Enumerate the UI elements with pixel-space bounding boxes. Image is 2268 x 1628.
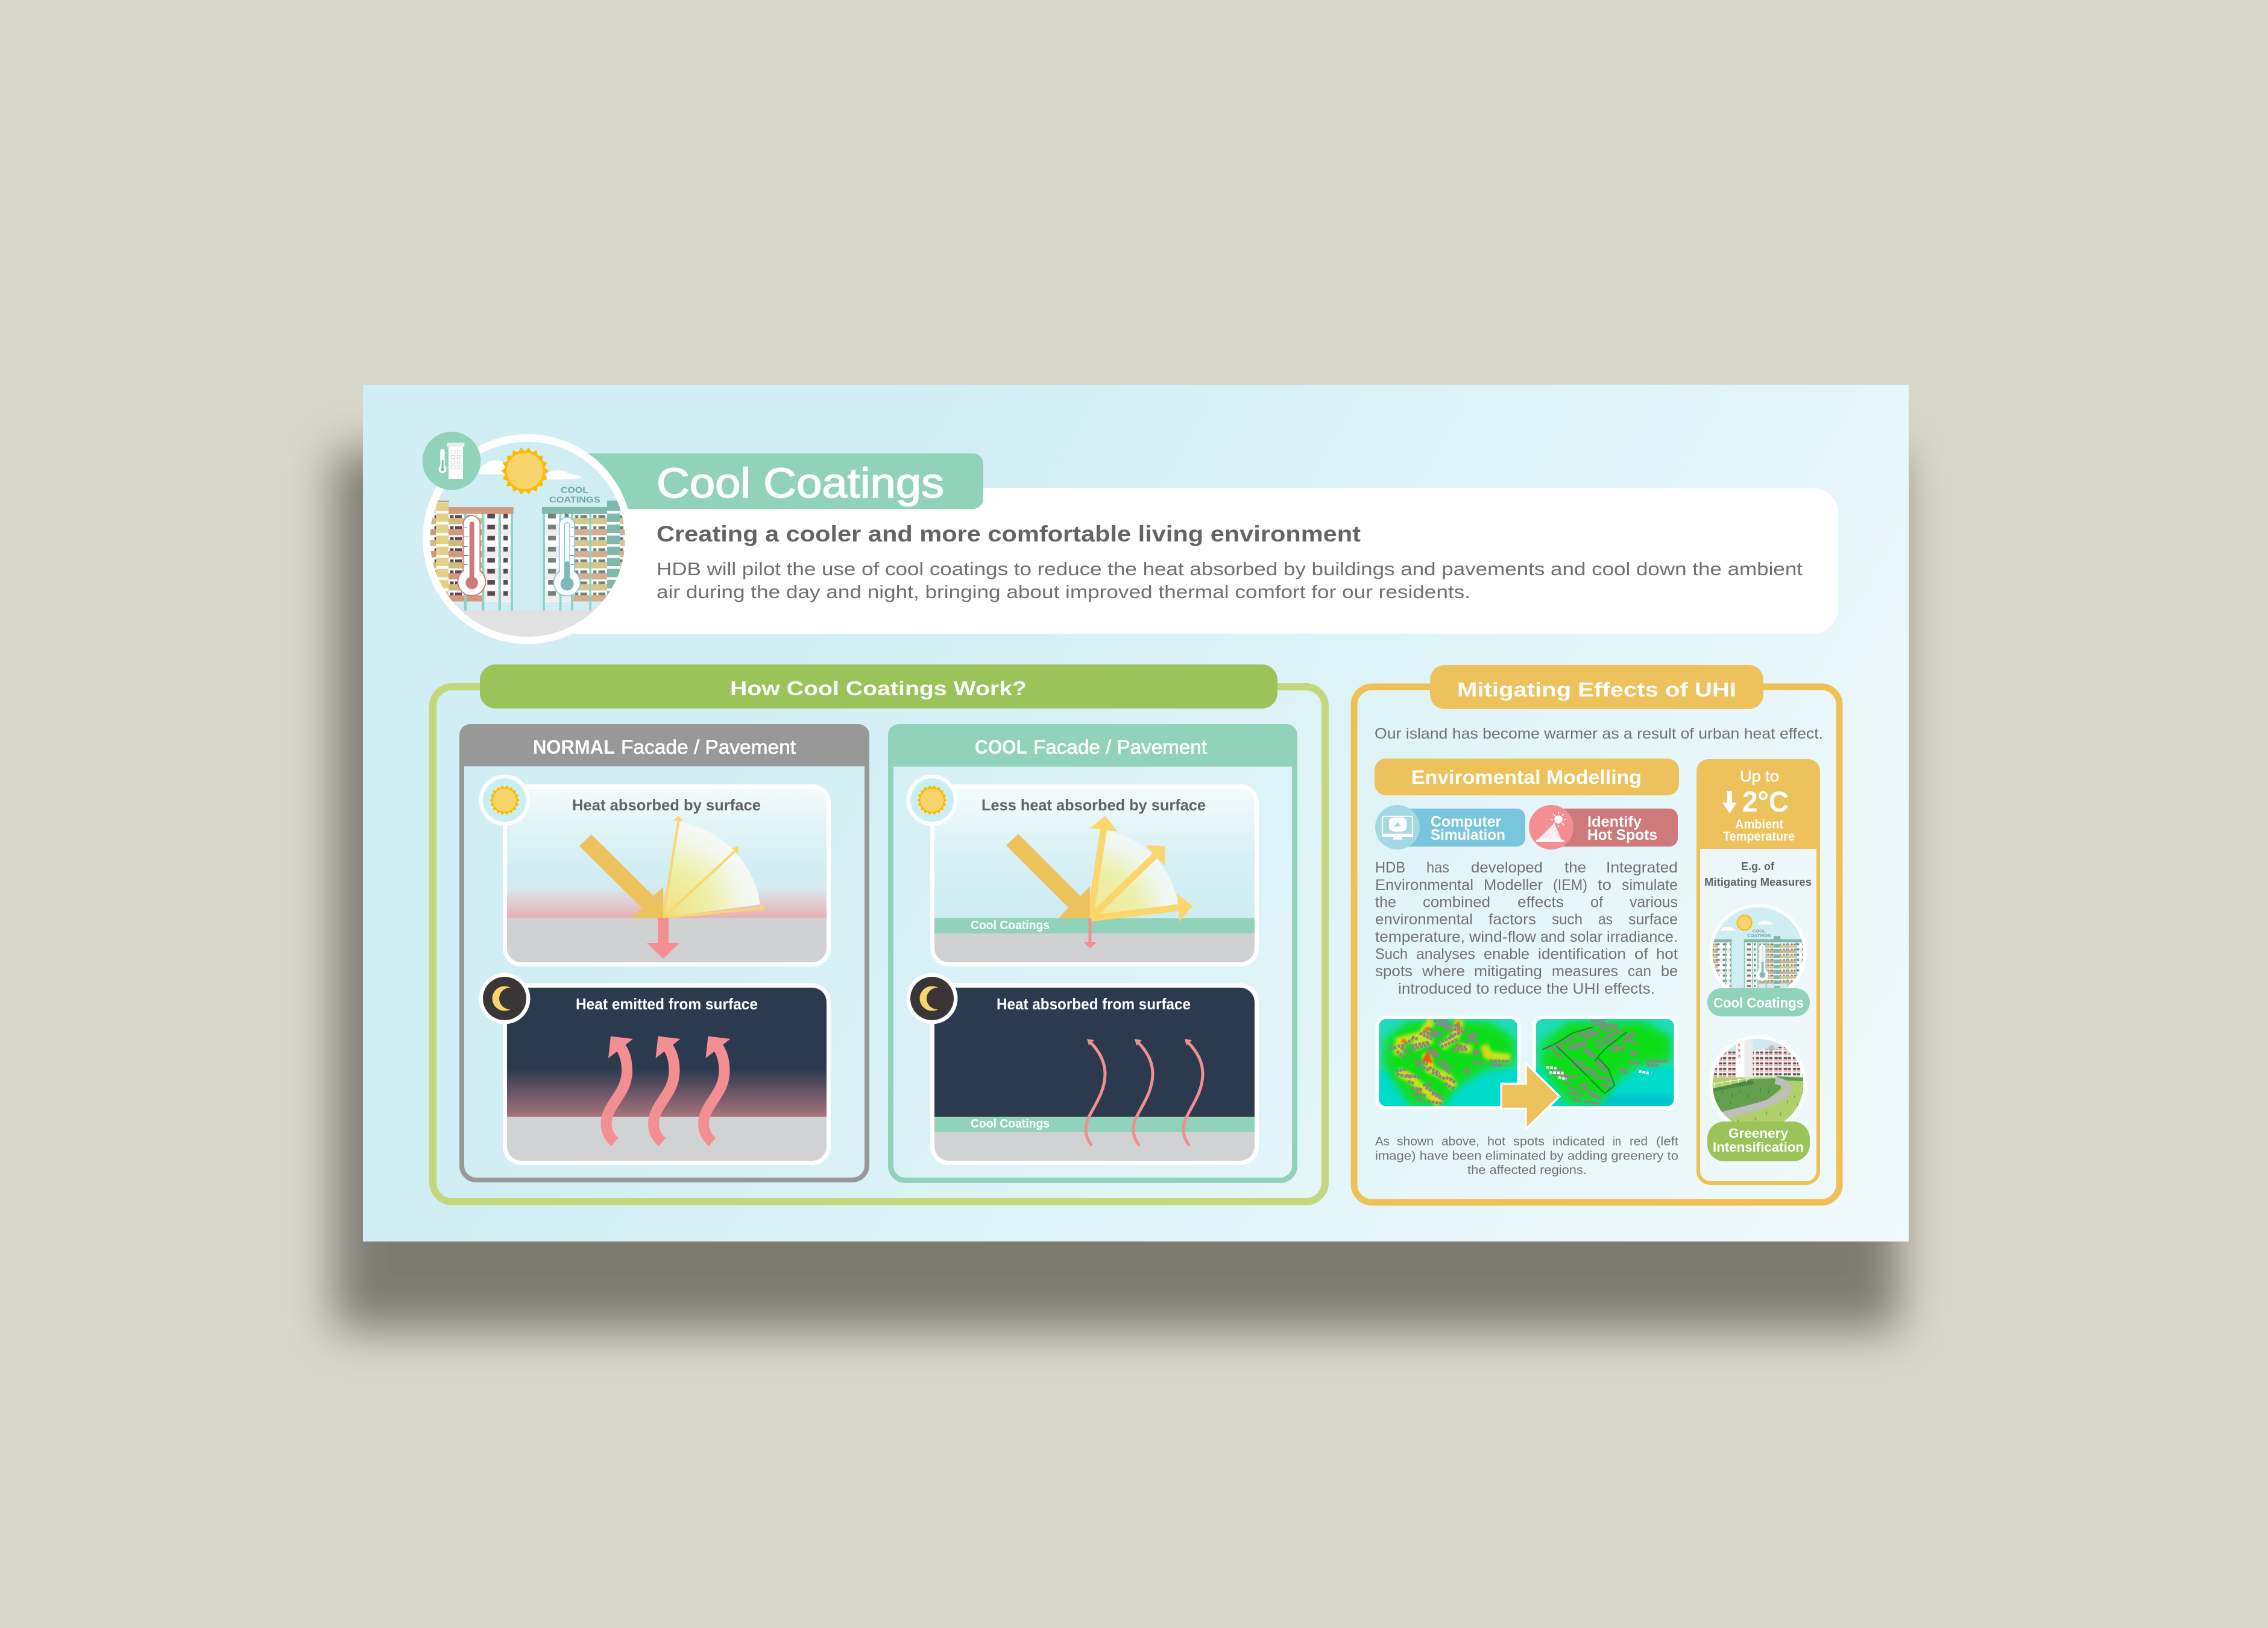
day diagram bbox=[505, 786, 828, 965]
title: Cool Coatings bbox=[657, 459, 944, 506]
right clouds bbox=[547, 470, 582, 479]
panel: cool facade bbox=[888, 724, 1297, 1181]
night caption: Heat emitted from surface bbox=[576, 995, 758, 1013]
emitted heat arrow 3 bbox=[704, 1036, 731, 1142]
caption: the affected regions. bbox=[1467, 1164, 1587, 1177]
emitted heat arrow 2 bbox=[654, 1036, 680, 1142]
examples heading: E.g. of bbox=[1741, 860, 1775, 872]
subheading bar bbox=[1375, 759, 1679, 795]
pill: cool coatings bbox=[1707, 988, 1810, 1017]
left heat map bbox=[1376, 1016, 1520, 1109]
column: ambient temperature and measures bbox=[1696, 759, 1820, 1183]
intro text bbox=[657, 558, 1803, 602]
column frame bbox=[1698, 761, 1818, 1183]
paragraph: environmental modeller: effects bbox=[1517, 894, 1564, 910]
ambient temperature: Ambient bbox=[1735, 818, 1783, 831]
day diagram bbox=[932, 786, 1256, 965]
pill: greenery intensification bbox=[1707, 1122, 1810, 1161]
paragraph: environmental modeller: and bbox=[1540, 929, 1565, 945]
paragraph: environmental modeller: to bbox=[1598, 877, 1611, 894]
paragraph: environmental modeller: the bbox=[1375, 894, 1396, 910]
caption: As bbox=[1375, 1135, 1390, 1148]
column header bbox=[1696, 759, 1820, 849]
icon: sun badge bbox=[907, 774, 957, 844]
right heat map bbox=[1532, 1016, 1677, 1109]
panel header bbox=[888, 724, 1297, 767]
panel heading: COOL bbox=[975, 736, 1027, 758]
caption: spots bbox=[1513, 1135, 1545, 1148]
icon: down arrow bbox=[1722, 791, 1737, 813]
reflected arrows bbox=[1090, 816, 1192, 921]
hot thermometer bbox=[458, 516, 485, 596]
paragraph: environmental modeller: Environmental bbox=[1375, 877, 1473, 894]
title badge bbox=[567, 453, 983, 509]
emitted heat arrow 2 bbox=[1133, 1039, 1153, 1146]
paragraph: environmental modeller: has bbox=[1426, 859, 1449, 876]
hero illustration: buildings with thermometers bbox=[422, 432, 628, 644]
left building bbox=[428, 500, 514, 611]
intro sentence: Our island has become warmer as a result of urban heat effect. bbox=[1375, 725, 1823, 742]
cool thermometer bbox=[553, 517, 580, 596]
pill: computer simulation bbox=[1375, 805, 1525, 850]
illustration: cool coatings: COOL bbox=[1753, 930, 1766, 934]
paragraph: environmental modeller: mitigating bbox=[1474, 963, 1542, 980]
night diagram bbox=[932, 985, 1256, 1163]
panel: normal facade bbox=[459, 724, 869, 1180]
drop shadow bbox=[335, 452, 1899, 1330]
paragraph: environmental modeller: hot bbox=[1656, 945, 1678, 962]
paragraph: environmental modeller: the bbox=[1564, 859, 1586, 876]
label: cool coatings on building bbox=[550, 487, 600, 503]
pill: cool coatings: Cool Coatings bbox=[1713, 995, 1804, 1011]
night caption: Heat absorbed from surface bbox=[997, 995, 1191, 1013]
label: cool coatings on building: COATINGS bbox=[549, 495, 600, 505]
right building bbox=[542, 500, 629, 611]
panel heading bbox=[533, 736, 796, 758]
coating label: Cool Coatings bbox=[971, 919, 1050, 932]
panel heading: Facade / Pavement bbox=[1033, 736, 1207, 758]
pill: computer simulation: Simulation bbox=[1431, 827, 1505, 844]
paragraph: environmental modeller: where bbox=[1422, 963, 1465, 980]
paragraph: environmental modeller: of bbox=[1590, 894, 1603, 910]
caption: (left bbox=[1656, 1135, 1678, 1148]
paragraph: environmental modeller bbox=[1375, 859, 1678, 997]
paragraph: environmental modeller: measures bbox=[1552, 963, 1618, 980]
emitted heat arrow 1 bbox=[1086, 1039, 1105, 1146]
left clouds bbox=[476, 460, 505, 475]
illustration: cool coatings: COATINGS bbox=[1747, 934, 1771, 938]
paragraph: environmental modeller: spots bbox=[1375, 963, 1413, 980]
paragraph: environmental modeller: wind-flow bbox=[1469, 929, 1537, 945]
paragraph: environmental modeller: temperature, bbox=[1375, 929, 1465, 945]
paragraph: environmental modeller: solar bbox=[1570, 929, 1602, 945]
caption: red bbox=[1630, 1135, 1648, 1148]
paragraph: environmental modeller: surface bbox=[1628, 911, 1678, 928]
paragraph: environmental modeller: irradiance. bbox=[1607, 929, 1678, 945]
heading bar bbox=[1430, 665, 1763, 709]
paragraph: environmental modeller: as bbox=[1598, 911, 1613, 928]
paragraph: environmental modeller: of bbox=[1634, 945, 1648, 962]
caption: indicated bbox=[1552, 1135, 1605, 1148]
paragraph: environmental modeller: such bbox=[1552, 911, 1583, 928]
incoming sun ray arrow bbox=[579, 835, 663, 918]
examples heading: Mitigating Measures bbox=[1704, 876, 1812, 888]
pill: greenery intensification: Greenery bbox=[1728, 1126, 1789, 1141]
absorbed heat arrow bbox=[1083, 918, 1097, 948]
pill: greenery intensification: Intensification bbox=[1713, 1140, 1804, 1155]
2 degrees: 2°C bbox=[1742, 786, 1789, 818]
icon: moon badge bbox=[479, 973, 531, 1042]
paragraph: environmental modeller: introduced to reduce the UHI effects. bbox=[1398, 980, 1655, 997]
night diagram bbox=[505, 985, 828, 1163]
paragraph: environmental modeller: simulate bbox=[1622, 877, 1678, 894]
paragraph: environmental modeller: factors bbox=[1488, 911, 1536, 928]
arrow between maps bbox=[1501, 1063, 1560, 1129]
small badge icon bbox=[423, 432, 480, 490]
block number: A bbox=[1738, 1054, 1742, 1059]
day caption: Heat absorbed by surface bbox=[572, 796, 761, 814]
caption: shown bbox=[1397, 1135, 1434, 1148]
ambient temperature bbox=[1723, 818, 1795, 844]
caption: in bbox=[1613, 1135, 1621, 1148]
examples heading bbox=[1704, 860, 1812, 888]
reflected arrows bbox=[663, 816, 766, 918]
heading: Mitigating Effects of UHI bbox=[1457, 678, 1736, 701]
caption: hot bbox=[1487, 1135, 1505, 1148]
paragraph: environmental modeller: various bbox=[1630, 894, 1678, 910]
infographic card bbox=[363, 385, 1909, 1242]
reflected heat fan bbox=[1090, 831, 1178, 918]
block number bbox=[1738, 1042, 1742, 1059]
caption: image) have been eliminated by adding greenery to bbox=[1375, 1149, 1678, 1163]
paragraph: environmental modeller: developed bbox=[1471, 859, 1543, 876]
up to: Up to bbox=[1740, 767, 1779, 785]
paragraph: environmental modeller: combined bbox=[1423, 894, 1490, 910]
paragraph: environmental modeller: identification bbox=[1538, 945, 1626, 962]
panel: mitigating effects of UHI bbox=[1354, 665, 1839, 1202]
pill: identify hot spots bbox=[1529, 805, 1678, 850]
paragraph: environmental modeller: can bbox=[1628, 963, 1651, 980]
icon: sun over building bbox=[1536, 812, 1566, 842]
panel: intro text bbox=[543, 488, 1838, 634]
intro text: air during the day and night, bringing about improved thermal comfort for our residents. bbox=[657, 581, 1470, 602]
intro text: HDB will pilot the use of cool coatings to reduce the heat absorbed by buildings and pavements and cool down the ambient bbox=[657, 558, 1803, 579]
label: cool coatings on building: COOL bbox=[561, 486, 588, 496]
block number: 9 bbox=[1738, 1048, 1740, 1053]
heading bar bbox=[480, 664, 1277, 708]
pill: identify hot spots: Hot Spots bbox=[1587, 827, 1657, 844]
reflected heat fan bbox=[663, 822, 760, 918]
panel frame bbox=[891, 733, 1295, 1181]
pill: computer simulation: Computer bbox=[1431, 813, 1501, 830]
block number: 0 bbox=[1738, 1042, 1740, 1047]
panel header bbox=[459, 724, 869, 766]
icon: monitor bbox=[1382, 816, 1413, 840]
caption: above, bbox=[1441, 1135, 1479, 1148]
day caption: Less heat absorbed by surface bbox=[981, 796, 1206, 814]
frame bbox=[1354, 687, 1839, 1202]
illustration: cool coatings bbox=[1706, 901, 1812, 1010]
icon: moon badge bbox=[907, 973, 957, 1042]
paragraph: environmental modeller: Modeller bbox=[1484, 877, 1543, 894]
ambient temperature: Temperature bbox=[1723, 830, 1795, 844]
absorbed heat arrow bbox=[647, 918, 679, 959]
paragraph: environmental modeller: (IEM) bbox=[1553, 877, 1587, 894]
illustration: greenery bbox=[1706, 1031, 1812, 1141]
subheading: Enviromental Modelling bbox=[1411, 766, 1642, 788]
paragraph: environmental modeller: be bbox=[1661, 963, 1678, 980]
paragraph: environmental modeller: Such bbox=[1375, 945, 1408, 962]
coating label: Cool Coatings bbox=[971, 1117, 1050, 1131]
pill: identify hot spots: Identify bbox=[1587, 813, 1642, 830]
panel frame bbox=[462, 733, 867, 1180]
panel heading: NORMAL bbox=[533, 736, 615, 758]
caption bbox=[1375, 1135, 1678, 1177]
subtitle: Creating a cooler and more comfortable living environment bbox=[657, 522, 1361, 546]
sun bbox=[501, 447, 549, 494]
paragraph: environmental modeller: enable bbox=[1484, 945, 1529, 962]
paragraph: environmental modeller: Integrated bbox=[1606, 859, 1678, 876]
icon: sun badge bbox=[479, 774, 531, 844]
heading: How Cool Coatings Work? bbox=[730, 677, 1027, 699]
panel: how cool coatings work bbox=[433, 664, 1325, 1202]
emitted heat arrow 1 bbox=[606, 1036, 633, 1142]
paragraph: environmental modeller: analyses bbox=[1416, 945, 1475, 962]
frame bbox=[433, 687, 1325, 1202]
emitted heat arrow 3 bbox=[1183, 1039, 1203, 1146]
paragraph: environmental modeller: HDB bbox=[1375, 859, 1405, 876]
incoming sun ray arrow bbox=[1006, 834, 1090, 918]
heat map comparison bbox=[1376, 1016, 1677, 1129]
paragraph: environmental modeller: environmental bbox=[1375, 911, 1473, 928]
panel heading: Facade / Pavement bbox=[621, 736, 796, 758]
